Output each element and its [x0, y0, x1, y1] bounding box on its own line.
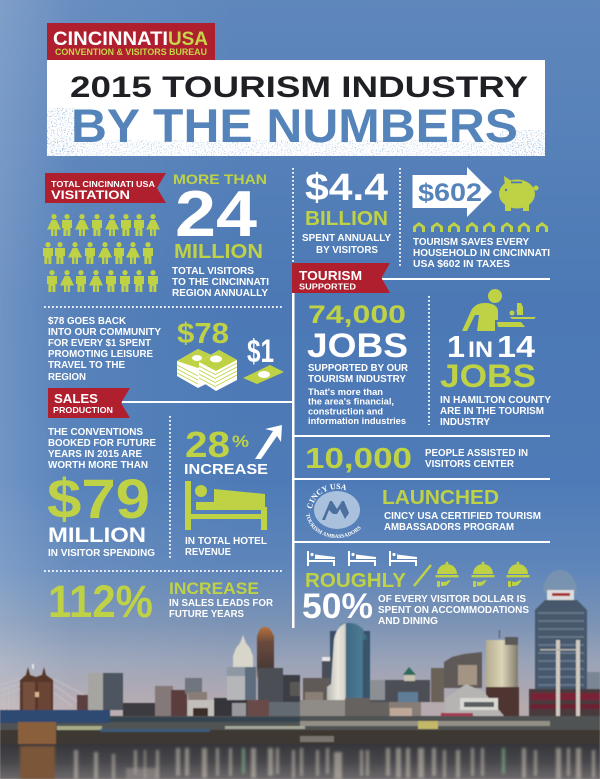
stat: 4.4 billion: SPENT ANNUALLY — [302, 233, 391, 244]
stat: 4.4 billion: BY VISITORS — [316, 245, 378, 256]
stat: 79 million: $79 — [47, 467, 150, 530]
banner: total visitation: VISITATION — [51, 188, 130, 202]
center low-rise — [300, 667, 430, 720]
text: household savings: TOURISM SAVES EVERY — [413, 237, 529, 248]
stat: 28 percent increase: % — [232, 432, 249, 451]
stat: launched: CINCY USA CERTIFIED TOURISM — [384, 511, 541, 522]
banner: sales production — [48, 388, 130, 418]
icon: single bill — [243, 365, 284, 384]
people icons — [43, 214, 160, 292]
stat: 50 percent — [302, 587, 529, 627]
stat: 74,000 jobs — [307, 301, 409, 427]
bridge cables — [0, 678, 84, 712]
red stadium — [529, 640, 600, 719]
city skyline photo — [0, 570, 600, 779]
stat: launched — [382, 487, 541, 533]
icons: three beds — [307, 551, 417, 566]
text: 78 dollars return — [48, 316, 161, 383]
stadium white structure — [390, 684, 506, 720]
banner: total visitation — [45, 173, 166, 203]
banner: tourism supported: SUPPORTED — [299, 282, 356, 292]
banner: sales production: SALES — [54, 392, 98, 406]
text: sales leads: FUTURE YEARS — [169, 609, 244, 620]
icon: server with tray — [462, 289, 536, 331]
stat: 74,000 jobs: information industries — [308, 416, 406, 427]
stat: 10,000 people — [305, 443, 528, 475]
stat: 112 percent: 112% — [48, 576, 153, 627]
bridge pier — [18, 722, 56, 746]
icon: bed — [185, 481, 267, 530]
stat: 79 million: WORTH MORE THAN — [48, 460, 148, 471]
icon: ambassadors badge: CINCY USA — [307, 484, 346, 508]
Great American tower with crown — [535, 570, 600, 690]
text: sales leads — [169, 580, 274, 620]
stat: 10,000 people: 10,000 — [305, 443, 412, 475]
stat: 1 in 14 jobs: 1 — [447, 329, 465, 364]
stat: 74,000 jobs: JOBS — [307, 327, 408, 365]
arrow with 602 — [412, 167, 492, 217]
logo: USA — [168, 29, 208, 50]
stat: 79 million: MILLION — [48, 524, 146, 547]
logo: CONVENTION & VISITORS BUREAU — [55, 47, 207, 58]
house icons — [413, 222, 548, 232]
stat: 74,000 jobs: construction and — [308, 406, 383, 418]
icon: piggy bank — [497, 176, 538, 211]
stat: 24 million visitors — [172, 171, 269, 299]
title line one: 2015 TOURISM INDUSTRY — [70, 71, 528, 104]
stat: 28 percent increase: INCREASE — [184, 461, 268, 478]
stat: 74,000 jobs: 74,000 — [308, 301, 406, 329]
white title panel — [47, 60, 545, 156]
text: hotel revenue — [185, 536, 267, 558]
stat: 50 percent: AND DINING — [378, 616, 438, 627]
logo — [47, 23, 215, 60]
logo: CINCINNATI — [53, 29, 168, 50]
white cupola tower — [227, 635, 256, 700]
icon: ambassadors badge — [306, 484, 361, 538]
text: 78 dollars return: $78 GOES BACK — [48, 316, 127, 327]
stat: 1 dollar: $1 — [247, 333, 274, 369]
stat: 74,000 jobs: That's more than — [308, 387, 383, 398]
stat: 1 in 14 jobs: IN — [468, 337, 493, 362]
riverfront — [0, 716, 600, 745]
text: household savings — [413, 237, 550, 270]
text: hotel revenue: IN TOTAL HOTEL — [185, 536, 267, 547]
stat: 79 million — [47, 427, 156, 559]
brown art deco tower — [247, 627, 300, 723]
text: sales leads: INCREASE — [169, 580, 259, 598]
stat: launched: AMBASSADORS PROGRAM — [384, 522, 514, 533]
stat: 10,000 people: PEOPLE ASSISTED IN — [425, 448, 528, 459]
stat: 79 million: YEARS IN 2015 ARE — [48, 449, 142, 460]
stat: 1 in 14 jobs: JOBS — [440, 358, 536, 394]
text: 78 dollars return: FOR EVERY $1 SPENT — [48, 338, 151, 349]
stat: 1 in 14 jobs — [440, 329, 551, 428]
glass tower — [327, 623, 370, 700]
stat: 50 percent: SPENT ON ACCOMMODATIONS — [378, 605, 529, 616]
slash divider — [414, 565, 431, 586]
text: roughly: ROUGHLY — [305, 570, 407, 592]
stat: 24 million visitors: MORE THAN — [173, 171, 267, 187]
stat: 24 million visitors: TO THE CINCINNATI — [172, 277, 269, 288]
text: hotel revenue: REVENUE — [185, 547, 231, 558]
stat: 28 percent increase: 28 — [185, 424, 230, 465]
stat: 10,000 people: VISITORS CENTER — [425, 459, 515, 470]
stat: launched: LAUNCHED — [382, 487, 499, 509]
bridge tower — [20, 664, 53, 713]
banner: sales production: PRODUCTION — [53, 405, 113, 415]
stat: 24 million visitors: REGION ANNUALLY — [172, 288, 268, 299]
text: 78 dollars return: REGION — [48, 372, 86, 383]
stat: 24 million visitors: MILLION — [174, 241, 263, 263]
banner: tourism supported — [292, 263, 390, 293]
title line two: BY THE NUMBERS — [71, 99, 518, 152]
icon: ambassadors badge: TOURISM AMBASSADORS — [306, 514, 361, 538]
text: 78 dollars return: TRAVEL TO THE — [48, 360, 125, 371]
text: sales leads: IN SALES LEADS FOR — [169, 598, 274, 609]
text: household savings: HOUSEHOLD IN CINCINNATI — [413, 248, 550, 259]
banner: total visitation: TOTAL CINCINNATI USA — [51, 179, 155, 189]
stat: 79 million: IN VISITOR SPENDING — [48, 548, 155, 559]
text: household savings: USA $602 IN TAXES — [413, 259, 510, 270]
arrow with 602: $602 — [418, 179, 482, 207]
stat: 74,000 jobs: TOURISM INDUSTRY — [308, 374, 406, 385]
banner: tourism supported: TOURISM — [299, 269, 362, 283]
text: 78 dollars return: INTO OUR COMMUNITY — [48, 327, 161, 338]
stat: 1 in 14 jobs: 14 — [497, 329, 536, 364]
bridge deck — [0, 710, 110, 723]
speckled texture — [47, 108, 545, 156]
arrow: up right — [255, 425, 282, 459]
stat: 74,000 jobs: the area's financial, — [308, 396, 394, 408]
flag building — [303, 657, 331, 701]
stat: 50 percent: 50% — [302, 587, 373, 626]
stat: 4.4 billion: $4.4 — [305, 167, 388, 209]
text: 78 dollars return: PROMOTING LEISURE — [48, 349, 153, 360]
stat: 1 in 14 jobs: ARE IN THE TOURISM — [440, 406, 544, 417]
stat: 4.4 billion — [302, 167, 391, 256]
icon: money stacks — [177, 349, 237, 391]
stat: 24 million visitors: 24 — [175, 177, 257, 250]
stat: 79 million: THE CONVENTIONS — [48, 427, 143, 438]
stat: 79 million: BOOKED FOR FUTURE — [48, 438, 156, 449]
stat: 4.4 billion: BILLION — [305, 208, 388, 230]
stat: 74,000 jobs: SUPPORTED BY OUR — [308, 363, 409, 374]
stat: 1 in 14 jobs: INDUSTRY — [440, 417, 490, 428]
icons: three cloches — [436, 562, 530, 587]
left buildings — [77, 673, 248, 725]
stat: 78: $78 — [177, 318, 229, 350]
river reflection — [0, 744, 600, 779]
stat: 24 million visitors: TOTAL VISITORS — [172, 266, 254, 277]
stat: 50 percent: OF EVERY VISITOR DOLLAR IS — [378, 594, 526, 605]
right buildings — [431, 630, 519, 717]
stat: 1 in 14 jobs: IN HAMILTON COUNTY — [440, 395, 551, 406]
stat: 28 percent increase — [184, 424, 268, 478]
